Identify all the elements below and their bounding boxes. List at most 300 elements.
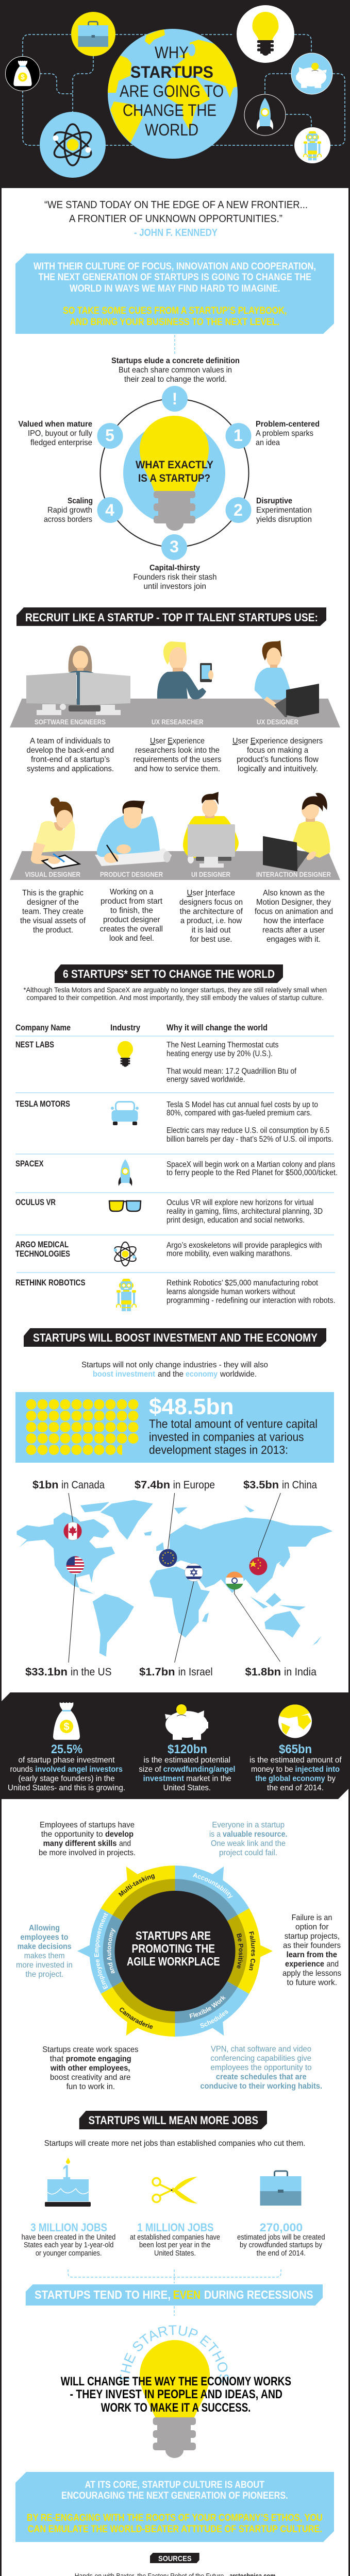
text block: failure is an option: and [327,1960,339,1969]
stat: global economy: $65bn [279,1742,312,1756]
title: CHANGE THE [123,101,216,120]
row 2 role labels [25,870,331,878]
definition labels: fledged enterprise [30,438,92,447]
region labels: $3.5bn [243,1479,279,1491]
text block: failure is an option [282,1913,341,1987]
wheel segment labels: Flexible Work [190,1996,226,2019]
ui designer figure [183,792,239,868]
panel: one million jobs [130,2177,220,2258]
heading: sources: SOURCES [158,2554,192,2563]
stat: angel investors: (early stage founders) in the [19,1774,115,1783]
icon: birthday cake [45,2158,91,2207]
text block: flexible schedules: employees the opportunity to [210,2063,312,2072]
text block: flexible schedules: create schedules that are [216,2073,307,2081]
text block: row 2 role descriptions: Motion Designer, they [256,898,331,907]
definition labels: Experimentation [256,506,312,515]
diagram title: IS A STARTUP? [138,472,210,484]
diagram title: WHAT EXACTLY [136,459,213,471]
world map with regional investment [16,1479,332,1678]
text block: failure is an option: to future work. [287,1978,337,1987]
text block: failure is an option: learn from the [287,1951,337,1959]
definition labels: Rapid growth [47,506,92,515]
row: nest labs: heating energy use by 20% (U.S.). [166,1049,273,1058]
text block: row 2 role descriptions: look and feel. [109,934,154,943]
panel: intro callout: SO TAKE SOME CUES FROM A STARTUP’S PLAYBOOK, [63,305,287,316]
text block: develop many skills [39,1821,136,1857]
row: rethink robotics [15,1278,335,1311]
numbered nodes: 2 [234,501,243,519]
wheel title: PROMOTING THE [132,1942,215,1955]
region labels: $33.1bn [25,1666,68,1678]
numbered nodes: 5 [105,426,114,445]
stat: total venture capital: invested in companies at various [149,1430,304,1444]
text block: failure is an option: apply the lessons [282,1969,341,1978]
panel: team illustration row 2 [10,792,340,880]
row: spacex: SPACEX [15,1159,44,1168]
flag: european union [159,1549,177,1567]
row: tesla motors: 80%, compared with gas-fueled premium cars. [166,1109,312,1117]
definition labels: Capital-thirsty [149,564,200,572]
panel: intro callout: AND BRING YOUR BUSINESS TO THE NEXT LEVEL. [70,316,279,328]
row: nest labs: That would mean: 17.2 Quadrillion Btu of [166,1067,297,1076]
text block: investment intro [81,1361,268,1379]
stat: angel investors: 25.5% [51,1742,82,1756]
icon: robot [294,127,330,163]
numbered nodes: 4 [105,501,114,519]
text block: work spaces: Startups create work spaces [42,2045,138,2054]
wheel arrowheads [77,1863,273,2039]
definition labels: Disruptive [256,497,292,505]
text block: row 2 role descriptions: Also known as the [263,889,325,897]
text block: work spaces: promote engaging [66,2055,131,2063]
wheel title: AGILE WORKPLACE [127,1955,220,1968]
text block: failure is an option: option for [295,1923,329,1931]
definition labels: Founders risk their stash [133,573,216,582]
panel: one million jobs: 1 MILLION JOBS [137,2221,213,2234]
numbered nodes: 1 [234,426,243,445]
ux designer figure [255,640,319,717]
text block: row 2 role descriptions: User Interface [187,889,235,897]
stat: crowdfunding market: investment [143,1774,185,1783]
icon: large light bulb [140,416,209,531]
panel: team illustration row 1 [10,640,340,727]
row: nest labs: The Nest Learning Thermostat cuts [166,1041,279,1049]
panel: one million jobs: United States. [154,2249,196,2258]
text block: develop many skills: be more involved in projects. [39,1849,136,1857]
definition labels: yields disruption [256,515,312,524]
text block: row 1 role descriptions: systems and applications. [27,765,114,773]
icon: birthday cake: 1 [62,2161,71,2184]
flag: canada [63,1522,82,1540]
icon: money bag [5,57,40,91]
wheel segment labels [94,1873,256,2029]
icon: rocket [244,94,286,135]
visual designer figure [31,798,79,869]
text block: row 2 role descriptions: This is the graphic [22,889,84,897]
text block: row 1 role descriptions: develop the back-end and [27,746,114,755]
stat: global economy: by [327,1774,336,1783]
panel: what exactly is a startup diagram [19,357,320,591]
definition labels: Startups elude a concrete definition [111,357,240,365]
row: argo medical technologies: Argo’s exoskeletons will provide paraplegics with [166,1241,322,1250]
text block: row 1 role descriptions: front-end of a startup’s [31,755,110,764]
text block: investment intro: boost investment [93,1370,156,1379]
definition labels: IPO, buyout or fully [28,429,92,438]
footnote [24,986,327,1002]
wheel segment labels: Employee Empowerment [94,1912,108,1990]
text block: row 2 role descriptions: designers focus on [179,898,243,907]
row: oculus vr: OCULUS VR [15,1197,56,1207]
text block: valuable resource: is a [209,1830,221,1839]
title: ARE GOING TO [120,82,224,100]
text block: row 1 role descriptions: product’s functions flow [237,755,319,764]
hero illustration: globe and connected icons [5,5,345,178]
text block: row 1 role descriptions: and how to service them. [135,765,220,773]
text block: flexible schedules: conferencing capabilities give [210,2054,311,2063]
row: oculus vr [15,1197,323,1225]
definition labels: their zeal to change the world. [124,375,227,384]
text block: develop many skills: Employees of startups have [40,1821,135,1829]
text block: develop many skills: develop [105,1830,134,1839]
panel: crowdfunded jobs [237,2171,325,2258]
row: tesla motors: billion barrels per day - that’s 52% of U.S. oil imports. [166,1135,334,1144]
text block: row 2 role descriptions: engages with it. [266,935,321,944]
text block: row 2 role descriptions: team. They create [22,907,84,916]
definition labels: Scaling [68,497,93,505]
heading: hire during recessions [26,2284,323,2306]
panel: three million jobs: or younger companies. [36,2249,102,2258]
panel: venture capital total [15,1392,334,1463]
stat: global economy: is the estimated amount of [249,1756,342,1765]
text block: make decisions: makes them [24,1952,65,1960]
text block: row 1 role descriptions: User Experience designers [232,737,323,745]
title: WHY [155,43,189,62]
ethos statement [61,2375,291,2415]
stat: crowdfunding market: $120bn [168,1742,207,1756]
stat: angel investors: of startup phase investment [19,1756,115,1765]
panel: one million jobs: been lost per year in the [139,2241,210,2249]
row: rethink robotics: programming - redefining our interaction with robots. [166,1296,335,1305]
table: six startups [15,1023,338,1311]
stat: crowdfunding market: size of [139,1765,161,1774]
flag: israel [185,1563,203,1582]
icon: briefcase [71,12,115,56]
stat: global economy [249,1742,342,1792]
icon: briefcase [260,2171,301,2206]
stat: global economy: injected into [295,1765,340,1774]
text block: row 2 role descriptions: creates the overall [100,925,163,934]
chart: agile workplace wheel [77,1866,273,2037]
heading: boost investment [24,1328,326,1347]
text block: flexible schedules: conducive to their working habits. [200,2082,322,2091]
text block: row 2 role descriptions: the visual assets of [20,917,86,925]
panel: three million jobs: States each year by 1-year-old [24,2241,113,2249]
stat: crowdfunding market [139,1742,235,1792]
icon: piggy bank [165,1704,208,1740]
stat: total venture capital: $48.5bn [149,1394,234,1419]
numbered nodes [97,386,252,560]
text block: row 1 role descriptions: A team of individuals to [30,737,110,745]
definition labels: A problem sparks [256,429,313,438]
region labels: $1.7bn [139,1666,175,1678]
text block: work spaces [42,2045,138,2091]
text block: work spaces: fun to work in. [66,2082,115,2091]
text block: row 1 role descriptions: researchers look into the [135,746,220,755]
panel: investment statistics band [2,1692,348,1799]
stat: crowdfunding market: United States. [163,1784,211,1792]
icon: ethos light bulb [140,2340,210,2458]
text block: row 2 role descriptions: designer of the [27,898,79,907]
row: tesla motors: Tesla S Model has cut annual fuel costs by up to [166,1100,318,1109]
text block: row 2 role descriptions: the product. [33,926,73,935]
text block: row 1 role descriptions: logically and intuitively. [238,765,318,773]
quote [44,199,308,239]
ux researcher figure [157,641,213,700]
quote: - JOHN F. KENNEDY [134,227,218,239]
text block: investment intro: Startups will not only change industries - they will also [81,1361,268,1369]
text block: row 2 role descriptions: reacts after a user [262,926,325,935]
text block: failure is an option: experience [285,1960,324,1969]
stat: angel investors [8,1742,125,1792]
text block: failure is an option: startup projects, [285,1932,340,1941]
row: oculus vr: print design, education and social networks. [166,1216,305,1225]
software engineers figure [26,646,130,715]
text block: row 2 role descriptions: focus on animation and [255,907,333,916]
wheel segment labels: and Autonomy [107,1928,115,1973]
panel: closing callout: AT ITS CORE, STARTUP CULTURE IS ABOUT [85,2479,264,2490]
text block: make decisions: employees to [20,1933,69,1942]
heading: recruit like a startup [16,607,326,626]
row: spacex: to ferry people to the Red Planet for $500,000/ticket. [166,1168,338,1177]
text block: row 1 role descriptions: User Experience [150,737,205,745]
row: rethink robotics: learns alongside human workers without [166,1287,295,1296]
quote: A FRONTIER OF UNKNOWN OPPORTUNITIES.” [69,213,282,225]
wheel segment labels: Schedules [200,2010,228,2028]
wheel segment labels: Multi-tasking [119,1874,155,1897]
row 1 role labels: UX RESEARCHER [152,718,203,726]
text block: develop many skills: many different skills [43,1839,117,1848]
row: oculus vr: Oculus VR will explore new horizons for virtual [166,1198,313,1207]
panel: one million jobs: at established companies have [130,2233,220,2242]
panel: the startup ethos [61,2325,291,2458]
region labels: in Israel [178,1666,213,1678]
stat: global economy: the end of 2014. [267,1784,324,1792]
stat: angel investors: United States- and this is growing. [8,1784,125,1792]
row: argo medical technologies [15,1240,322,1266]
numbered nodes: ! [172,389,177,408]
row: oculus vr: reality in gaming, films, architectural planning, 3D [166,1207,323,1216]
row 2 role labels: INTERACTION DESIGNER [256,870,331,878]
definition labels [19,357,320,591]
footnote: compared to their competition. And most importantly, they still embody the values of startup culture. [27,993,324,1002]
globe [106,28,238,159]
heading: hire during recessions: DURING RECESSIONS [204,2288,313,2301]
wheel segment labels: Failures Can [249,1931,256,1970]
text block: valuable resource: One weak link and the [211,1839,286,1848]
text block: make decisions: Allowing [29,1924,60,1933]
text block: row 2 role descriptions: product from start [101,897,163,906]
map [16,1500,332,1656]
quote: “WE STAND TODAY ON THE EDGE OF A NEW FRONTIER... [44,199,308,211]
stat: angel investors: involved angel investors [35,1765,123,1774]
row 1 role labels [35,718,298,726]
text block: valuable resource [209,1821,288,1857]
wheel segment labels: Be Positive [237,1933,243,1969]
definition labels: until investors join [143,582,206,591]
panel: crowdfunded jobs: by crowdfunded startups by [240,2241,322,2249]
icon: piggy bank [291,53,332,94]
table header: Why it will change the world [166,1023,268,1032]
row: argo medical technologies: TECHNOLOGIES [15,1249,70,1259]
text block: row 2 role descriptions: for best use. [190,935,232,944]
heading: more jobs: STARTUPS WILL MEAN MORE JOBS [89,2114,258,2127]
heading: hire during recessions: STARTUPS TEND TO HIRE, [35,2288,171,2301]
row: tesla motors: TESLA MOTORS [15,1099,70,1109]
text block: develop many skills: and [119,1839,131,1848]
panel: closing callout: ENCOURAGING THE NEXT GENERATION OF PIONEERS. [61,2490,288,2501]
panel: intro callout: WORLD IN WAYS WE MAY FIND HARD TO IMAGINE. [70,283,280,294]
table header: Company Name [15,1023,71,1032]
ethos statement: - THEY INVEST IN PEOPLE AND IDEAS, AND [70,2387,282,2401]
definition labels: Valued when mature [19,420,92,429]
wheel segment labels: Camaraderie [120,2007,153,2029]
stat: angel investors: rounds [10,1765,33,1774]
text block: investment intro: worldwide. [220,1370,257,1379]
panel: crowdfunded jobs: the end of 2014. [257,2249,306,2258]
row 2 role labels: PRODUCT DESIGNER [100,870,163,878]
row 1 role labels: UX DESIGNER [257,718,298,726]
wheel segments [89,1866,261,2037]
text block: investment intro: and the [158,1370,184,1379]
region labels: in China [282,1479,317,1491]
row 2 role labels: VISUAL DESIGNER [25,870,80,878]
region labels: $1.8bn [245,1666,281,1678]
definition labels: across borders [44,515,92,524]
text block: row 2 role descriptions: Working on a [110,888,154,896]
table header: Industry [110,1023,140,1032]
text block: failure is an option: as their founders [283,1941,341,1950]
row 2 role labels: UI DESIGNER [191,870,230,878]
region labels: $7.4bn [135,1479,170,1491]
product designer figure [95,801,172,866]
panel: crowdfunded jobs: 270,000 [260,2221,303,2234]
table header [15,1023,268,1032]
text block: make decisions: more invested in [16,1961,73,1970]
region labels: in Canada [61,1479,105,1491]
text block: row 2 role descriptions [20,888,333,944]
text block: work spaces: boost creativity and are [50,2073,130,2082]
text block: row 1 role descriptions: requirements of the users [133,755,222,764]
text block: work spaces: that [50,2055,64,2063]
title: STARTUPS [130,63,213,81]
wheel segment labels: Accountability [193,1873,233,1898]
flag: china [249,1557,267,1575]
stat: crowdfunding market: is the estimated potential [143,1756,230,1765]
heading: hire during recessions: EVEN [173,2288,201,2301]
coin pictogram [26,1399,138,1455]
curved heading: THE STARTUP ETHOS [120,2325,229,2382]
heading: 6 startups: 6 STARTUPS* SET TO CHANGE THE WORLD [63,968,275,980]
panel: closing callout [15,2472,334,2542]
flag: united states [66,1556,85,1574]
text block: failure is an option: Failure is an [292,1913,332,1922]
row: nest labs [15,1040,297,1084]
icon: scissors [153,2177,197,2204]
flag: india [225,1571,244,1590]
panel: three million jobs: 3 MILLION JOBS [30,2221,107,2234]
panel: intro callout [15,253,334,334]
text block: jobs intro: Startups will create more net jobs than established companies who cut them. [44,2139,306,2148]
text block: row 2 role descriptions: a product, i.e. how [180,917,242,925]
region labels [25,1479,317,1678]
text block: sources list [20,2572,330,2576]
stat: total venture capital: The total amount of venture capital [149,1417,318,1430]
region labels: $1bn [32,1479,59,1491]
text block: develop many skills: the opportunity to [41,1830,103,1839]
icon: globe [278,1704,312,1738]
diagram title [136,459,213,484]
numbered nodes: 3 [170,537,179,556]
panel: three million jobs: have been created in the United [22,2233,115,2242]
text block: flexible schedules [200,2045,322,2091]
row 1 role labels: SOFTWARE ENGINEERS [35,718,106,726]
row: nest labs: energy saved worldwide. [166,1075,245,1084]
text block: row 1 role descriptions [27,737,323,773]
panel: three million jobs [22,2158,115,2258]
region labels: in India [284,1666,316,1678]
text block: valuable resource: project could fail. [219,1849,277,1857]
text block: row 2 role descriptions: it is laid out [192,926,231,935]
interaction designer figure [263,793,330,871]
stat: crowdfunding market: crowdfunding/angel [163,1765,235,1774]
text block: row 2 role descriptions: the architecture of [180,907,243,916]
leader lines [69,1493,280,1663]
text block: row 2 role descriptions: how the interface [263,917,324,925]
heading: sources [150,2553,199,2563]
text block: row 2 role descriptions: product designer [103,916,160,924]
wheel title [127,1929,220,1968]
row: rethink robotics: RETHINK ROBOTICS [15,1278,86,1287]
heading: more jobs [79,2111,267,2129]
icon: light bulb [237,5,294,63]
text block: flexible schedules: VPN, chat software and video [211,2045,311,2054]
row: tesla motors [15,1099,334,1144]
text block: work spaces: with other employees, [50,2064,130,2073]
text block: valuable resource: Everyone in a startup [212,1821,285,1829]
stat: global economy: the global economy [255,1774,325,1783]
title: WORLD [145,121,198,139]
definition labels: an idea [256,438,280,447]
ethos statement: WILL CHANGE THE WAY THE ECONOMY WORKS [61,2375,291,2388]
row: nest labs: NEST LABS [15,1040,54,1049]
definition labels: Problem-centered [256,420,320,429]
stat: global economy: money to be [251,1765,293,1774]
row: argo medical technologies: ARGO MEDICAL [15,1240,69,1249]
ethos statement: WORK TO MAKE IT A SUCCESS. [101,2401,251,2415]
title [120,43,224,139]
row: spacex [15,1159,338,1186]
text block: make decisions [16,1924,73,1979]
text block: make decisions: the project. [25,1970,63,1979]
stat: total venture capital: development stages in 2013: [149,1443,288,1456]
text block: make decisions: make decisions [18,1942,72,1951]
footnote: *Although Tesla Motors and SpaceX are arguably no longer startups, they are still relatively small when [24,986,327,994]
definition labels: But each share common values in [119,366,232,375]
icon: money bag [53,1702,80,1740]
text block: row 1 role descriptions: focus on making a [247,746,308,755]
text block: valuable resource: valuable resource. [223,1830,288,1839]
text block: investment intro: economy [186,1370,218,1379]
